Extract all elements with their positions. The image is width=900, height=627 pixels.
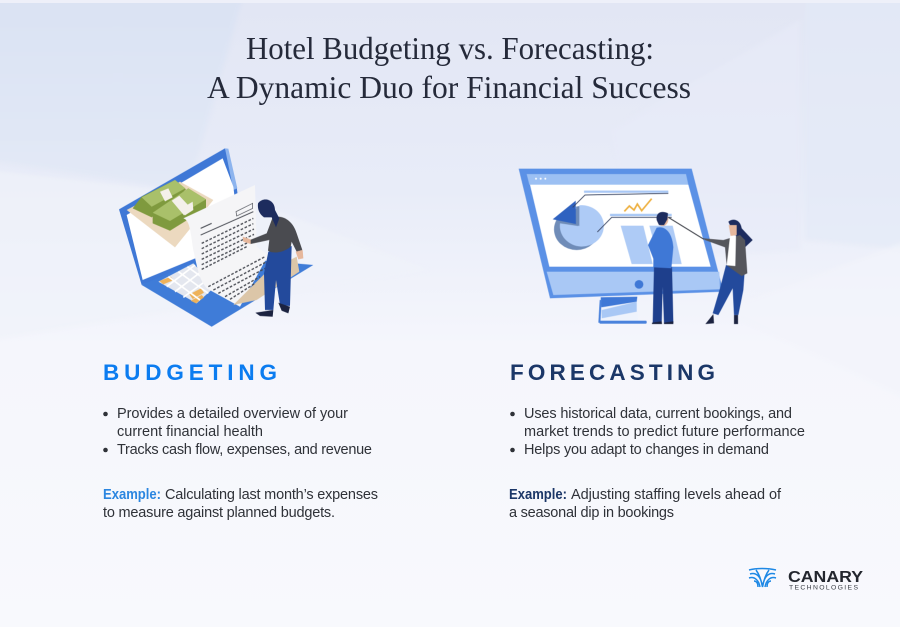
monitor chin	[547, 272, 720, 295]
illustration: laptop with budget spreadsheet	[119, 148, 313, 327]
heading: budgeting: BUDGETING	[103, 360, 277, 385]
trend line	[624, 199, 652, 211]
title: Hotel Budgeting vs. Forecasting:	[246, 30, 654, 66]
budgeting example: Example:	[103, 487, 161, 503]
logo: Canary Technologies: CANARY	[788, 569, 864, 586]
budgeting bullet list	[103, 406, 372, 458]
header lines	[584, 192, 672, 215]
budgeting example	[103, 487, 378, 521]
heading: forecasting: FORECASTING	[510, 360, 715, 385]
logo icon	[749, 568, 776, 587]
man	[648, 212, 673, 324]
bar shapes	[621, 226, 653, 264]
woman	[243, 199, 303, 317]
forecasting bullet list: market trends to predict future performance	[524, 424, 805, 440]
beige box	[127, 182, 213, 247]
budgeting example: Calculating last month’s expenses	[165, 487, 378, 503]
pointer	[668, 217, 704, 239]
budgeting bullet list: current financial health	[117, 424, 263, 440]
money stacks	[133, 180, 206, 231]
keyboard	[158, 263, 215, 303]
logo: Canary Technologies: TECHNOLOGIES	[789, 584, 858, 592]
forecasting example: a seasonal dip in bookings	[509, 505, 674, 521]
monitor frame	[519, 169, 723, 298]
forecasting example	[509, 487, 782, 521]
screen header	[527, 174, 688, 185]
illustration: monitor with analysts	[519, 169, 753, 324]
pie chart	[553, 193, 672, 250]
table lines	[201, 203, 267, 299]
screen	[530, 185, 711, 267]
title	[207, 30, 691, 105]
budgeting example: to measure against planned budgets.	[103, 505, 335, 521]
forecasting example: Adjusting staffing levels ahead of	[571, 487, 782, 503]
monitor button	[635, 280, 643, 289]
forecasting example: Example:	[509, 487, 567, 503]
paper spreadsheet	[183, 185, 268, 307]
forecasting bullet list: Helps you adapt to changes in demand	[524, 442, 769, 458]
woman	[703, 220, 753, 324]
monitor stand	[599, 297, 647, 324]
forecasting bullet list	[510, 406, 805, 458]
budgeting bullet list: Tracks cash flow, expenses, and revenue	[117, 442, 372, 458]
budgeting bullet list: Provides a detailed overview of your	[117, 406, 348, 422]
laptop screen frame	[119, 148, 243, 285]
title: A Dynamic Duo for Financial Success	[207, 69, 691, 105]
laptop screen	[127, 158, 240, 280]
laptop base	[142, 255, 313, 327]
logo: Canary Technologies	[749, 568, 864, 592]
forecasting bullet list: Uses historical data, current bookings, and	[524, 406, 792, 422]
